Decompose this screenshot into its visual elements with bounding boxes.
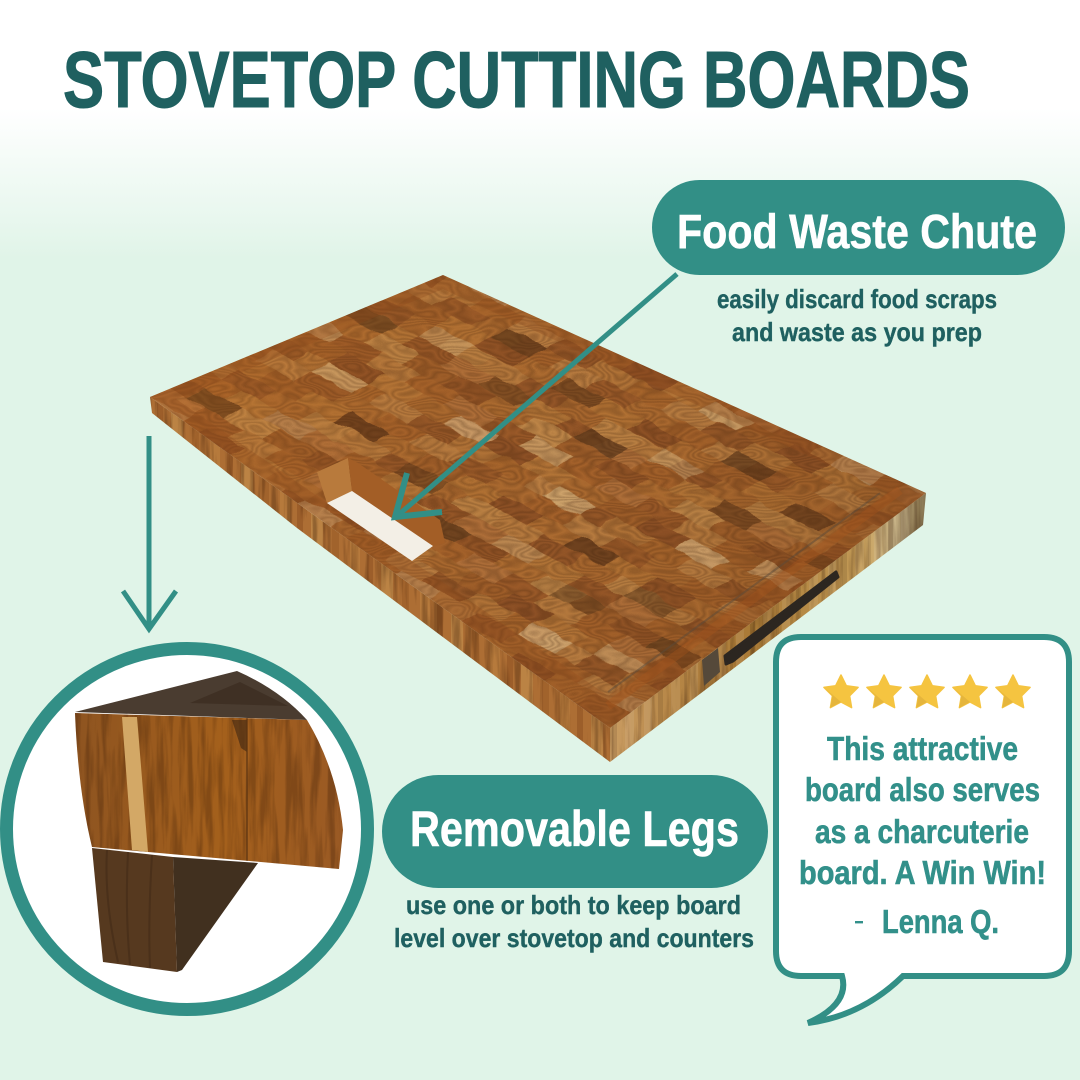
- board face grain: [70, 710, 350, 875]
- board top surface: [150, 275, 926, 728]
- pill: Removable Legs: Removable Legs: [410, 801, 739, 857]
- caption: food waste chute: and waste as you prep: [732, 317, 982, 347]
- pill: Food Waste Chute: [652, 180, 1065, 275]
- testimonial author: Lenna Q.: [882, 903, 999, 940]
- caption: removable legs: use one or both to keep board: [406, 890, 741, 920]
- cutting board photo: [130, 260, 940, 766]
- handle slot: [725, 572, 838, 664]
- pill: Removable Legs: [382, 775, 768, 888]
- caption: removable legs: [394, 890, 754, 953]
- testimonial quote: board. A Win Win!: [799, 854, 1046, 891]
- testimonial quote: board also serves: [805, 771, 1040, 808]
- leg side face: [173, 857, 258, 972]
- caption: food waste chute: easily discard food scraps: [717, 284, 997, 314]
- board front face: [75, 713, 343, 869]
- testimonial quote: This attractive: [827, 730, 1018, 767]
- caption: removable legs: level over stovetop and counters: [394, 923, 754, 953]
- arrow: to food waste chute: [395, 274, 677, 517]
- arrow: down to leg detail: [123, 436, 176, 629]
- speech bubble testimonial: [776, 637, 1069, 1023]
- recess in board top: [190, 682, 288, 706]
- juice groove rim: [150, 275, 926, 728]
- board side: short right edge: [605, 488, 930, 766]
- caption: food waste chute: [717, 284, 997, 347]
- testimonial quote: as a charcuterie: [815, 813, 1029, 850]
- food waste chute left wall: [317, 458, 352, 503]
- testimonial quote: [799, 730, 1046, 891]
- bubble outline: [776, 637, 1069, 1023]
- leg front face: [92, 848, 177, 972]
- board side: long left edge: [145, 390, 615, 765]
- board top corner: [75, 671, 307, 720]
- food waste chute white insert: [327, 491, 433, 561]
- circular leg detail: [6, 648, 368, 1010]
- food waste chute back wall: [348, 458, 445, 546]
- five star rating: [824, 675, 1030, 708]
- leg grain rings: [106, 850, 152, 968]
